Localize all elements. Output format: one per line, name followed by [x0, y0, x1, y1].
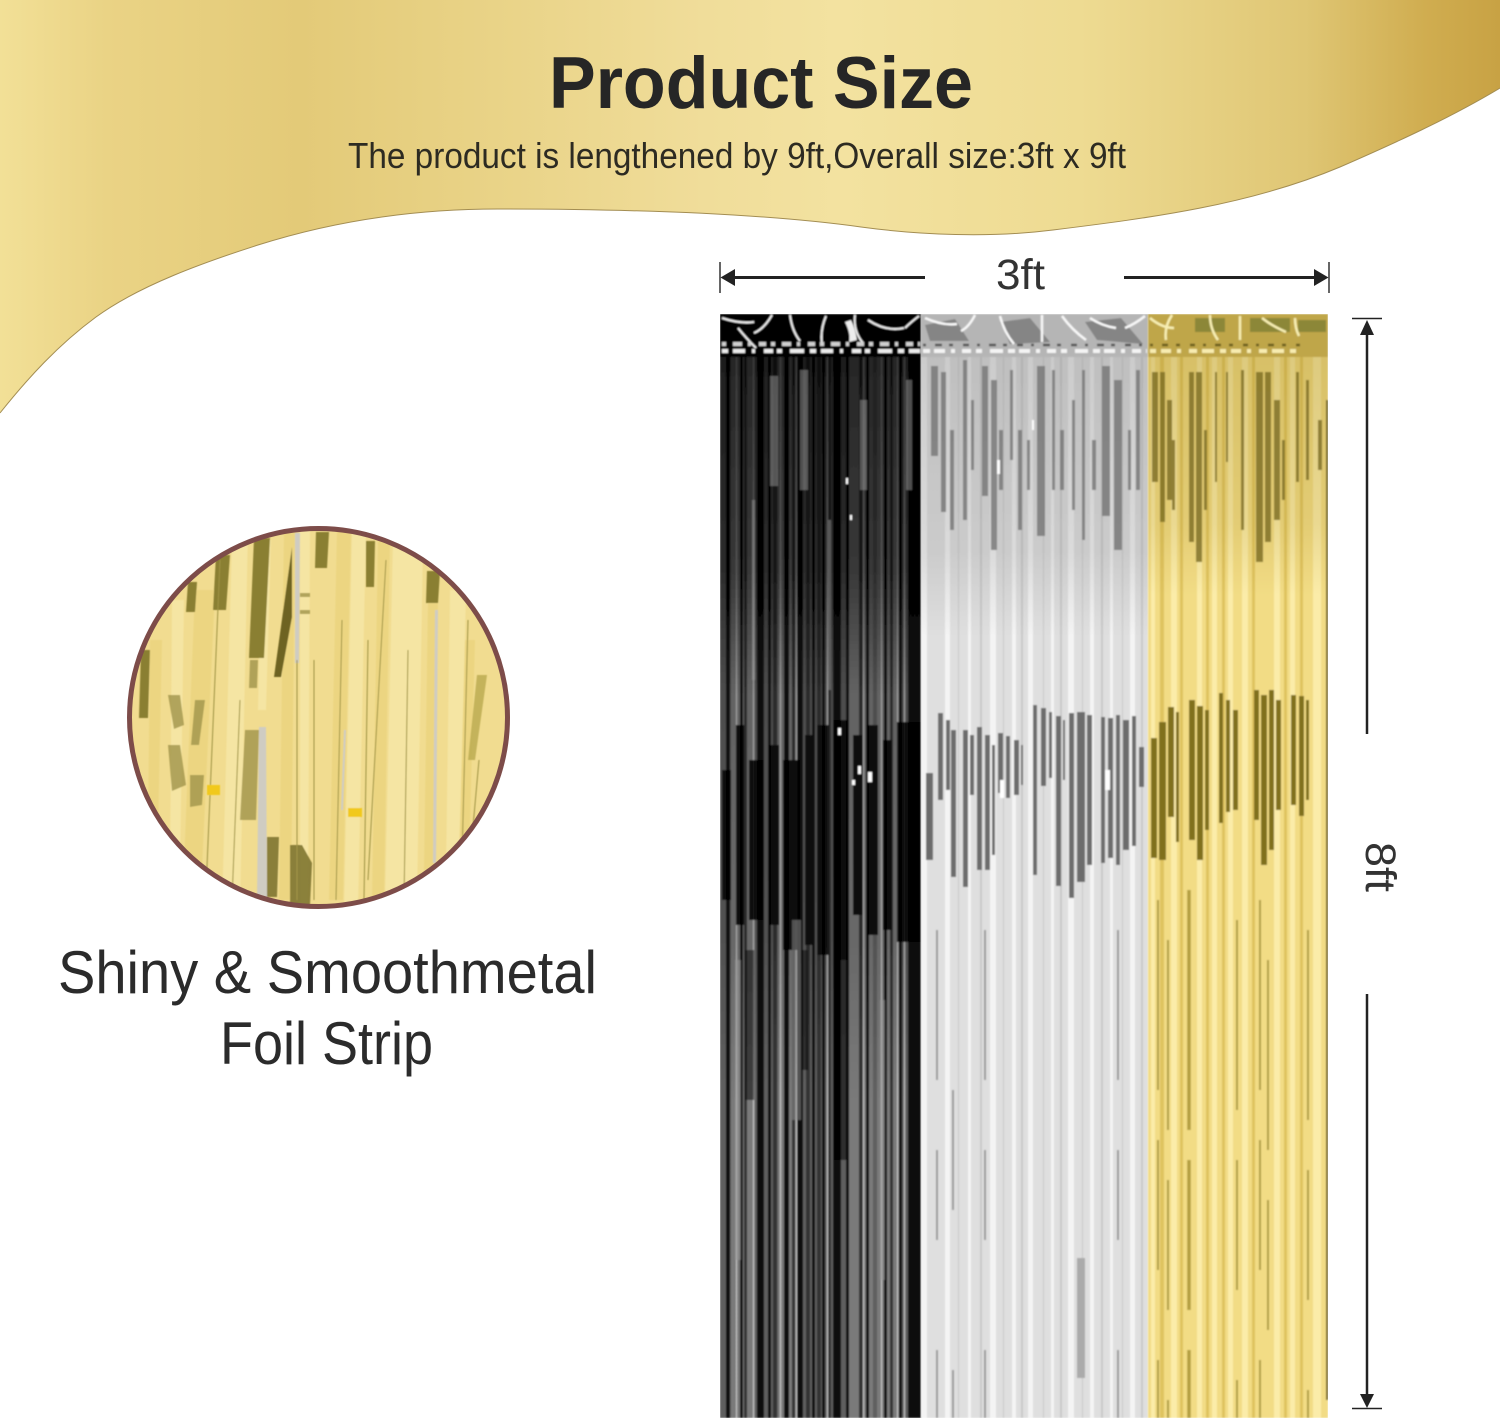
gold lower olive strips [1158, 900, 1308, 1418]
label: 8ft: 8ft [1356, 842, 1404, 892]
detail circle: gold foil strips close-up [125, 525, 515, 915]
silver curtain header [921, 314, 1148, 357]
dark olive reflections [139, 532, 440, 718]
subtitle: The product is lengthened by 9ft,Overall size:3ft x 9ft [348, 135, 1126, 176]
label: 3ft: 3ft [996, 251, 1045, 299]
gold upper dark streaks [1152, 370, 1322, 562]
black foil curtain [720, 314, 921, 1418]
gold foil curtain [1148, 314, 1328, 1418]
caption: shiny and smooth metal foil strip: Shiny & Smoothmetal [58, 939, 597, 1006]
black curtain header [720, 314, 921, 357]
height dimension arrow: 8ft [1352, 318, 1404, 1408]
header gold wave background [0, 0, 1500, 413]
grey gaps between strips [257, 533, 438, 897]
silver upper dark streaks [931, 360, 1140, 550]
caption: shiny and smooth metal foil strip: Foil Strip [220, 1010, 433, 1077]
thin dark strip edges [206, 560, 479, 900]
black curtain dark band [722, 720, 921, 960]
gold mid dark band [1151, 690, 1309, 865]
circle border [130, 528, 508, 906]
silver foil curtain [921, 314, 1148, 1418]
silver mid dark band [926, 705, 1144, 898]
silver lower grey strips [937, 930, 1118, 1418]
foil strip base [125, 525, 515, 915]
title: Product Size [549, 43, 973, 124]
curtains: black, silver and gold foil fringe [720, 314, 1328, 1418]
width dimension arrow: 3ft [720, 251, 1329, 299]
caption: shiny and smooth metal foil strip [58, 939, 597, 1077]
gold curtain header [1148, 314, 1328, 357]
yellow spots [207, 785, 362, 817]
